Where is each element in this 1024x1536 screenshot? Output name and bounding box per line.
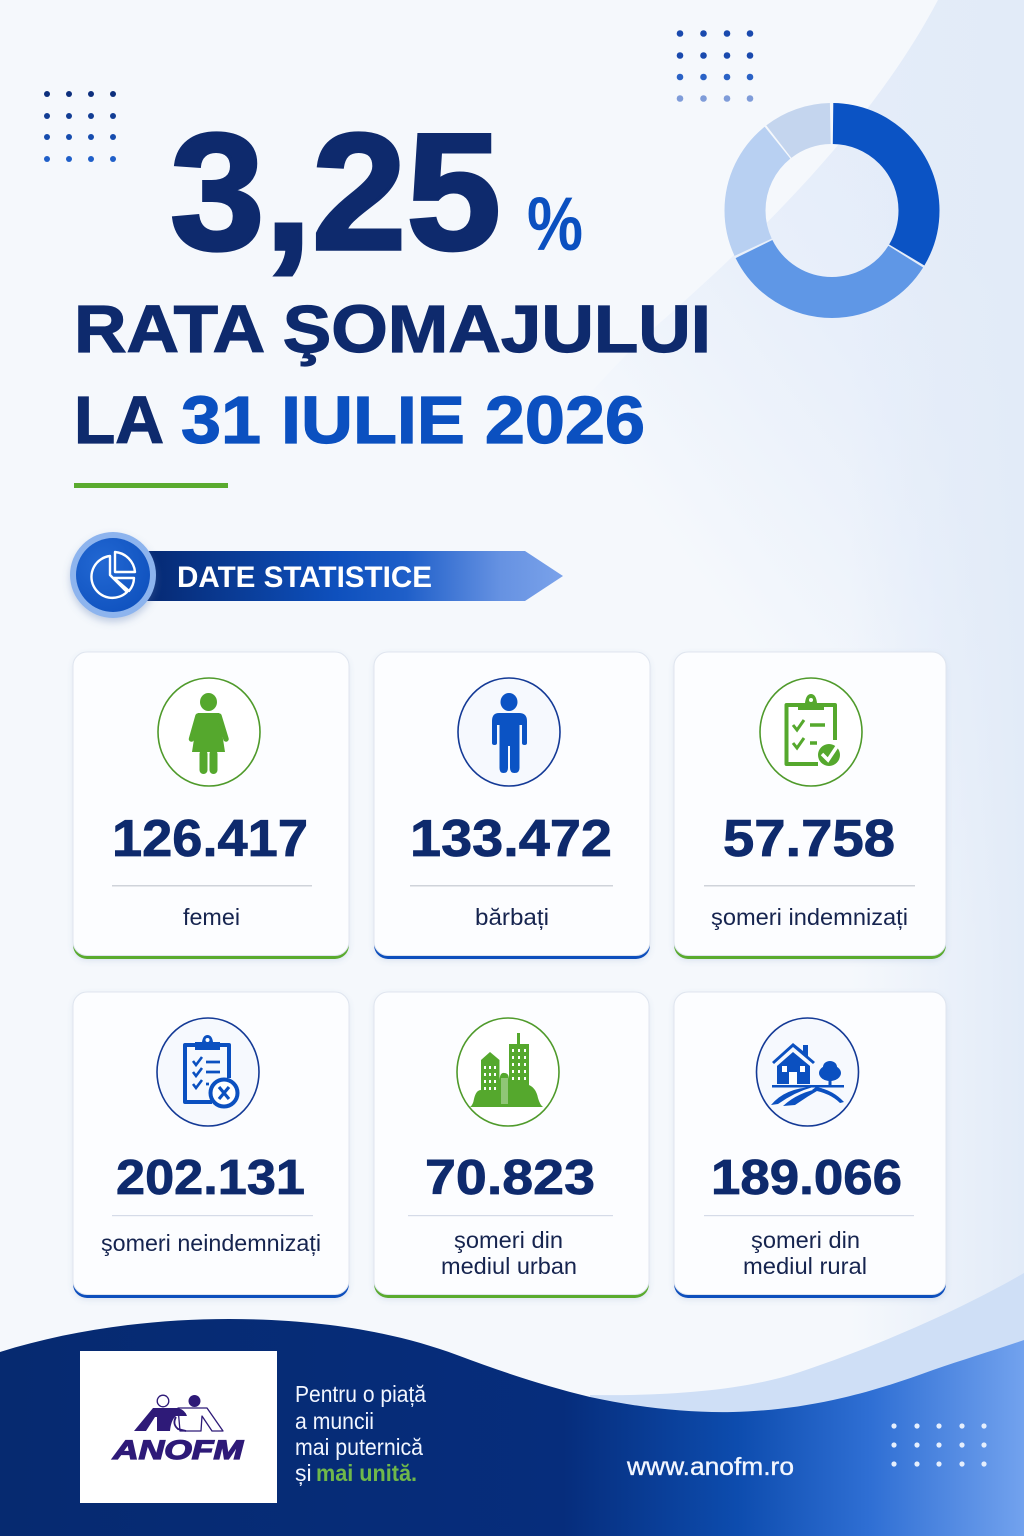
footer slogan: Pentru o piață [295,1381,426,1407]
title: LA [74,383,164,458]
section banner: date statistice: DATE STATISTICE [177,561,432,594]
website: www.anofm.ro [626,1453,794,1481]
footer slogan [295,1381,426,1486]
title: RATA ŞOMAJULUI [74,292,711,367]
card: șomeri neindemnizați [73,992,349,1298]
icon: woman [158,678,260,786]
card: șomeri neindemnizați: şomeri neindemnizați [101,1230,321,1256]
card: femei [73,652,349,959]
big number: 3,25 %: 3,25 [170,100,501,285]
section banner: date statistice [70,532,563,618]
card: mediul rural [674,992,946,1298]
icon: man [458,678,560,786]
card: bărbați: bărbați [475,904,549,930]
title: 31 IULIE 2026 [181,383,645,458]
card: mediul urban: 70.823 [425,1151,595,1205]
icon: rural house [756,1018,858,1126]
footer wave [0,1319,1024,1536]
icon: city buildings [457,1018,559,1126]
card: mediul rural: şomeri din [751,1227,860,1253]
title [74,292,711,458]
dots: top right [677,30,753,102]
icon: clipboard with check [760,678,862,786]
footer slogan: a muncii [295,1408,374,1434]
logo: ANOFM: ANOFM [112,1435,244,1465]
dots: top left [44,91,116,162]
dots: footer [891,1423,987,1467]
card: mediul rural: mediul rural [743,1253,867,1279]
card: femei: 126.417 [112,810,308,868]
card: mediul rural: 189.066 [711,1151,902,1205]
footer slogan: mai unită. [316,1460,417,1486]
card: femei: femei [183,904,240,930]
card: șomeri indemnizați: şomeri indemnizați [711,904,908,930]
logo: ANOFM [80,1351,277,1503]
card: mediul urban: mediul urban [441,1253,577,1279]
card: șomeri indemnizați: 57.758 [723,810,895,868]
card: șomeri neindemnizați: 202.131 [116,1151,305,1205]
footer slogan: mai puternică [295,1434,423,1460]
banner icon: pie chart [70,532,156,618]
icon: clipboard with x [157,1018,259,1126]
card: bărbați: 133.472 [410,810,612,868]
card: mediul urban: şomeri din [454,1227,563,1253]
card: mediul urban [374,992,649,1298]
donut chart [745,124,919,298]
green underline [74,483,228,488]
big number: 3,25 %: % [527,182,583,267]
footer slogan: și [295,1460,312,1486]
light wave [590,1273,1024,1425]
card: șomeri indemnizați [674,652,946,959]
card: bărbați [374,652,650,959]
